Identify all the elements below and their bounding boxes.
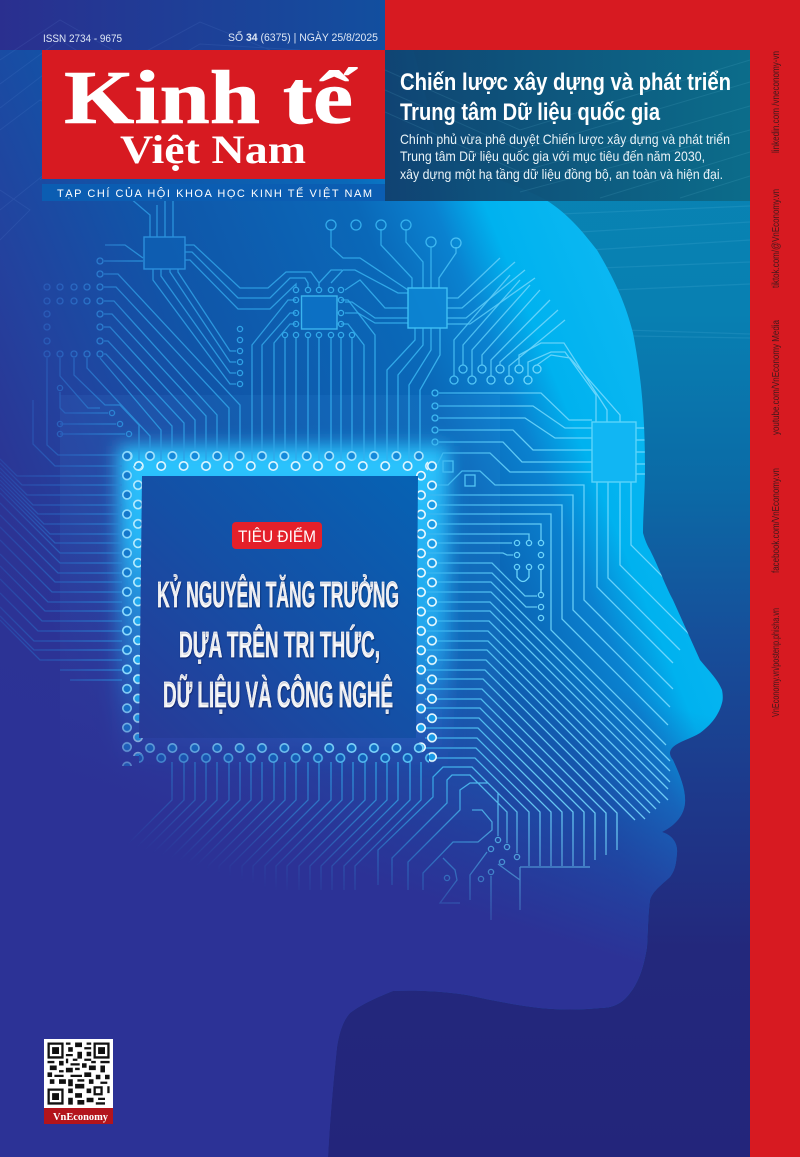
headline: DỮ LIỆU VÀ CÔNG NGHỆ <box>163 673 393 715</box>
qr code <box>44 1039 113 1124</box>
social links: tiktok.com/@VnEconomy.vn <box>770 189 782 288</box>
chip glow <box>118 446 448 764</box>
panel: top story <box>385 50 750 201</box>
right red column <box>750 0 800 1157</box>
qr code: VnEconomy <box>53 1112 109 1123</box>
social links: VnEconomy.vn/postenp.phisha.vn <box>770 608 782 717</box>
circuit board <box>0 198 690 920</box>
contact ring rows around main chip <box>117 446 442 768</box>
masthead tagline <box>42 184 385 201</box>
badge: tiêu điểm: TIÊU ĐIỂM <box>238 527 316 546</box>
panel: top story: Trung tâm Dữ liệu quốc gia <box>400 99 661 126</box>
top red block <box>385 0 750 50</box>
masthead: Việt Nam <box>120 127 306 172</box>
background streaks <box>560 206 750 338</box>
microchip 3 <box>408 288 447 328</box>
issue number and date: SỐ 34 (6375) | NGÀY 25/8/2025 <box>228 30 378 44</box>
microchip 2 <box>302 296 337 329</box>
panel: top story: xây dựng một hạ tầng dữ liệu đồng bộ, an toàn và hiện đại. <box>400 166 723 182</box>
masthead: Kinh tế <box>64 56 358 140</box>
lighter circuit board zone <box>60 413 105 552</box>
social links: facebook.com/VnEconomy.vn <box>770 468 782 573</box>
panel: top story: Chiến lược xây dựng và phát triển <box>400 69 731 96</box>
panel: focus chip <box>139 476 418 738</box>
circuit traces <box>0 198 690 920</box>
social links: youtube.com/VnEconomy Media <box>770 320 782 435</box>
panel: top story: Chính phủ vừa phê duyệt Chiến lược xây dựng và phát triển <box>400 131 730 147</box>
badge: tiêu điểm <box>232 522 322 549</box>
social links <box>770 51 782 717</box>
faint chevrons <box>0 20 300 240</box>
headline <box>157 573 399 715</box>
issn: ISSN 2734 - 9675 <box>43 33 122 45</box>
headline: DỰA TRÊN TRI THỨC, <box>179 623 380 665</box>
social links: linkedin.com /vneconomy-vn <box>770 51 782 153</box>
panel: top story: Trung tâm Dữ liệu quốc gia với mục tiêu đến năm 2030, <box>400 148 705 164</box>
top band <box>0 0 385 50</box>
masthead tagline: TẠP CHÍ CỦA HỘI KHOA HỌC KINH TẾ VIỆT NAM <box>57 187 372 200</box>
lower fade of head <box>60 552 702 1157</box>
panel: focus chip: KỶ NGUYÊN TĂNG TRƯỞNG <box>157 573 399 615</box>
microchip 4 <box>592 422 636 482</box>
small circuit nodes <box>44 220 544 882</box>
microchip 1 <box>144 237 185 269</box>
masthead <box>42 50 385 179</box>
